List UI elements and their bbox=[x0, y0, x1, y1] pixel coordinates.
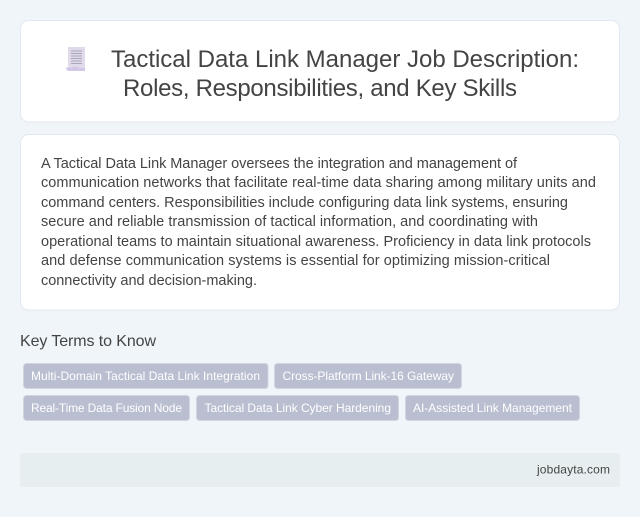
tag: data fusion node: Real-Time Data Fusion Node bbox=[31, 401, 182, 415]
title: Tactical Data Link Manager Job Description: bbox=[111, 46, 579, 73]
tag: cyber hardening: Tactical Data Link Cyber Hardening bbox=[204, 401, 391, 415]
description text: operational teams to maintain situational awareness. Proficiency in data link protocols bbox=[41, 234, 591, 250]
tag: cross-platform gateway bbox=[274, 364, 462, 388]
tag: cyber hardening bbox=[196, 396, 398, 420]
icon: document scroll bbox=[66, 47, 85, 71]
title: Roles, Responsibilities, and Key Skills bbox=[123, 75, 517, 102]
description text: and defense communication systems is essential for optimizing mission-critical bbox=[41, 253, 550, 269]
description text: command centers. Responsibilities include configuring data link systems, ensuring bbox=[41, 195, 568, 211]
panel: title card bbox=[20, 20, 620, 122]
description text: secure and reliable transmission of tactical information, and coordinating with bbox=[41, 214, 538, 230]
panel: description card bbox=[20, 134, 620, 310]
tag: cross-platform gateway: Cross-Platform Link-16 Gateway bbox=[282, 369, 454, 383]
heading: key terms: Key Terms to Know bbox=[20, 333, 156, 350]
description text: A Tactical Data Link Manager oversees the integration and management of bbox=[41, 156, 518, 172]
description text: communication networks that facilitate real-time data sharing among military units and bbox=[41, 175, 596, 191]
description text: connectivity and decision-making. bbox=[41, 273, 257, 289]
footer bbox=[20, 453, 620, 487]
tag: multi-domain integration bbox=[24, 364, 268, 388]
tag: data fusion node bbox=[24, 396, 190, 420]
tag: ai-assisted management bbox=[406, 396, 580, 420]
tag: multi-domain integration: Multi-Domain Tactical Data Link Integration bbox=[31, 369, 260, 383]
tags: key terms bbox=[24, 364, 580, 420]
tag: ai-assisted management: AI-Assisted Link Management bbox=[413, 401, 573, 415]
title bbox=[111, 46, 579, 102]
description text bbox=[41, 156, 596, 289]
footer: jobdayta.com bbox=[536, 462, 610, 476]
